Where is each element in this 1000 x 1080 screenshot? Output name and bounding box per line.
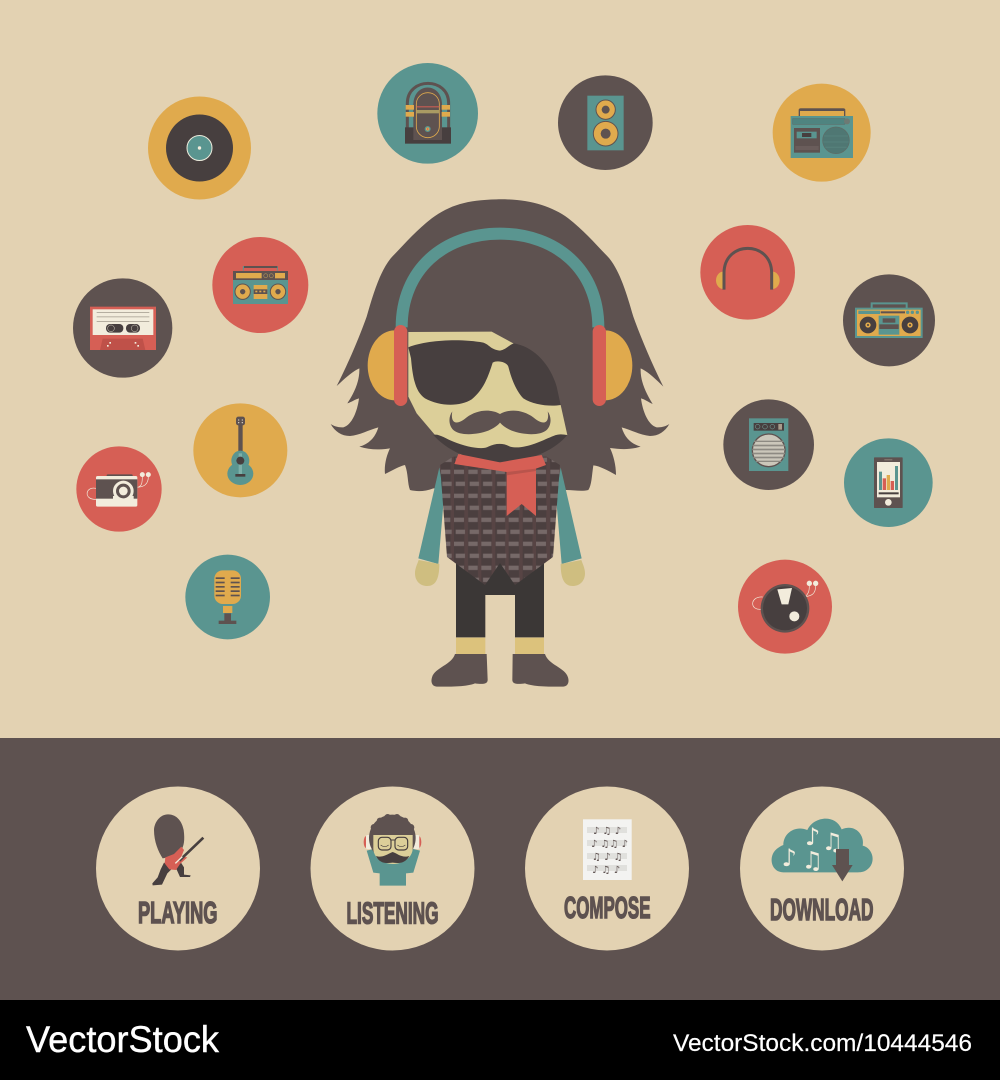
icon: sheet music: ♪ ♫ ♪ — [593, 826, 621, 837]
icon: ukulele — [193, 403, 287, 497]
label: playing: PLAYING — [138, 895, 218, 930]
face — [408, 332, 567, 457]
arms — [418, 467, 444, 564]
icon: cloud download: ♪ — [805, 823, 820, 851]
icon: vinyl record — [148, 96, 251, 200]
scarf — [454, 454, 546, 516]
panel: download — [740, 786, 904, 950]
icon: microphone — [185, 555, 270, 639]
character: hipster with headphones — [331, 199, 669, 687]
icon: disc player with earphones — [738, 560, 832, 654]
icon: smartphone equaliser — [844, 438, 933, 527]
hands — [415, 560, 439, 586]
icon: listener with headphones — [364, 814, 421, 886]
icon: red boombox — [212, 237, 308, 333]
icon: jukebox — [377, 63, 478, 164]
moustache — [449, 411, 551, 434]
footer bar — [0, 1000, 1000, 1080]
bottom band — [0, 738, 1000, 1000]
panel: listening — [310, 786, 474, 950]
icon: cassette tape — [73, 278, 172, 378]
beard — [433, 434, 567, 462]
icon: sheet music: ♫ ♪ ♫ — [592, 852, 623, 863]
footer logo: VectorStock — [26, 1019, 219, 1060]
icon: headphones — [700, 225, 795, 320]
icon: teal radio cassette — [773, 84, 871, 182]
icon: guitarist silhouette — [152, 814, 203, 885]
hair — [331, 199, 669, 491]
icon: portable cassette player — [76, 446, 162, 532]
ear cups — [368, 330, 395, 400]
icon: cloud download: ♫ — [802, 846, 823, 874]
headband — [402, 234, 598, 327]
background — [0, 0, 1000, 738]
panel: compose — [525, 786, 689, 950]
icon: sheet music: ♪ ♫ ♪ — [592, 865, 620, 876]
icon: guitar amplifier — [723, 399, 814, 490]
sunglasses — [408, 340, 561, 406]
footer url: VectorStock.com/10444546 — [673, 1030, 972, 1057]
icon: sheet music: ♪ ♫♫ ♪ — [591, 839, 628, 850]
label: listening: LISTENING — [346, 896, 438, 930]
boots — [431, 654, 488, 687]
trousers — [456, 557, 544, 637]
panel: playing — [96, 786, 260, 950]
vest — [440, 457, 560, 585]
icon: speaker — [558, 75, 653, 170]
icon: cloud download: ♪ — [782, 844, 797, 872]
icon: sheet music — [583, 819, 632, 880]
socks — [456, 638, 485, 654]
ear pads — [394, 325, 407, 406]
icon: orange boombox — [843, 274, 935, 366]
label: compose: COMPOSE — [564, 890, 650, 925]
icon: cloud download — [772, 819, 873, 881]
label: download: DOWNLOAD — [770, 892, 874, 927]
icon: cloud download: ♫ — [822, 828, 843, 856]
